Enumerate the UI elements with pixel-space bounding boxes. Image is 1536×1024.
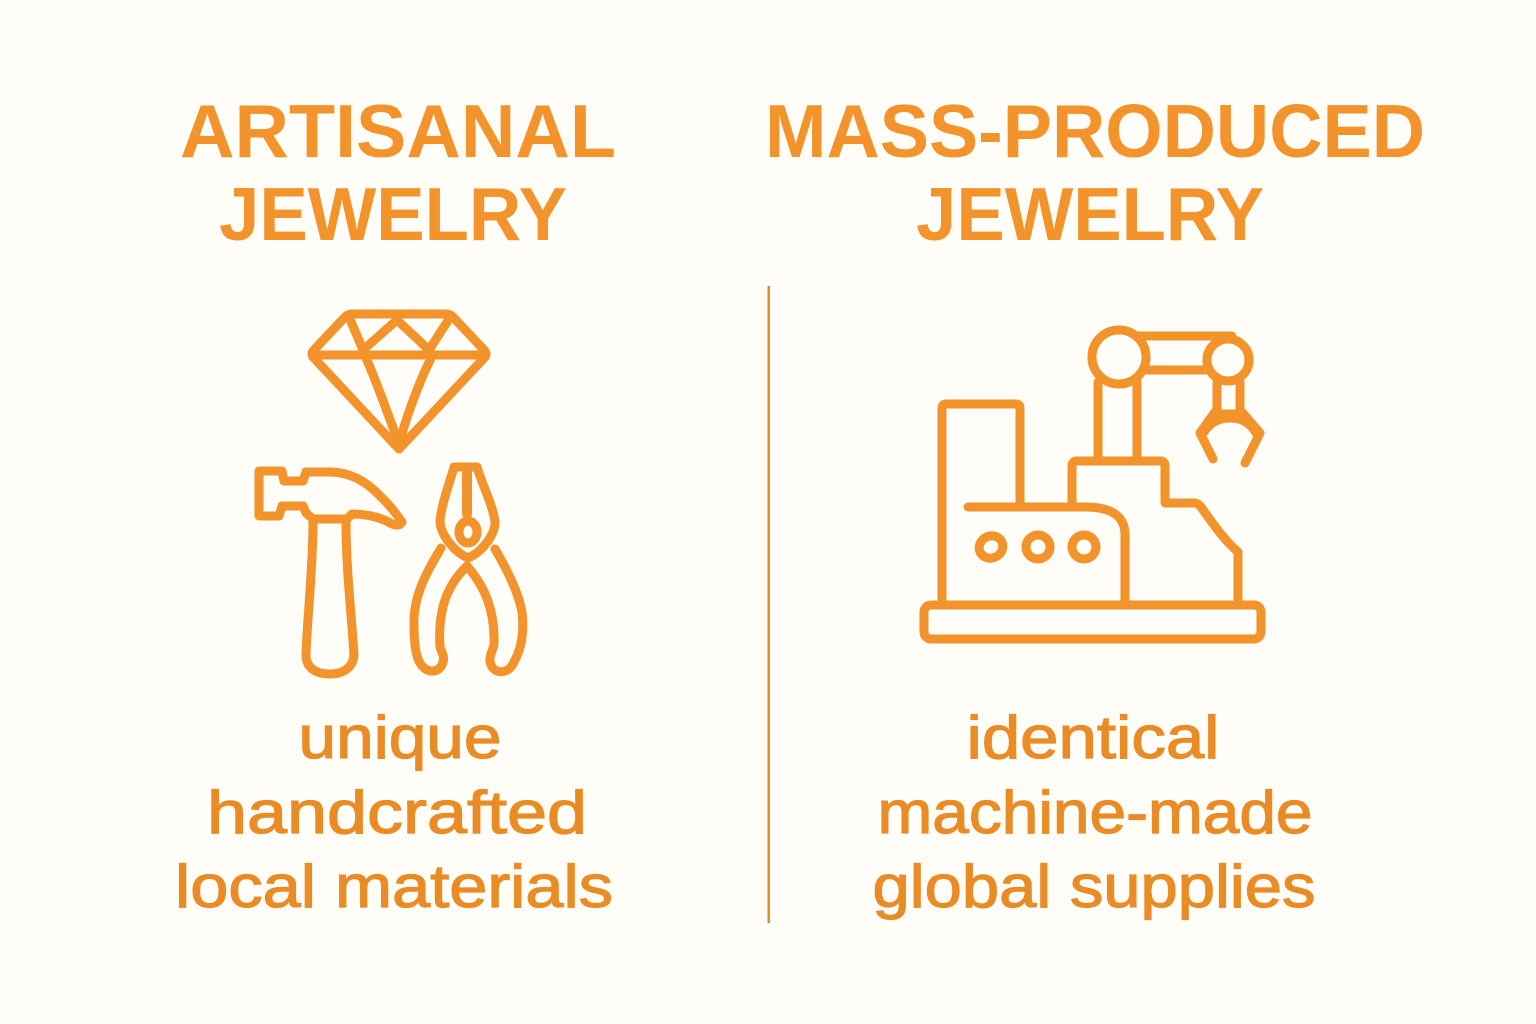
heading: mass-produced jewelry: JEWELRY [916,172,1264,256]
icon: hammer [259,471,402,674]
center divider [768,286,770,923]
heading: artisanal jewelry: ARTISANAL [180,89,616,173]
text: mass-produced traits: machine-made [878,779,1312,846]
heading: artisanal jewelry [180,89,616,256]
text: artisanal traits [175,704,613,920]
text: artisanal traits: local materials [175,853,613,920]
icon: factory with robotic arm [924,330,1261,639]
heading: mass-produced jewelry [765,89,1425,256]
heading: mass-produced jewelry: MASS-PRODUCED [765,89,1425,173]
text: mass-produced traits: identical [966,704,1220,771]
text: artisanal traits: unique [298,704,502,771]
icon: diamond [312,314,486,449]
text: mass-produced traits [872,704,1316,920]
icon: pliers [414,467,523,672]
text: artisanal traits: handcrafted [207,779,587,846]
heading: artisanal jewelry: JEWELRY [219,172,567,256]
text: mass-produced traits: global supplies [872,853,1316,920]
